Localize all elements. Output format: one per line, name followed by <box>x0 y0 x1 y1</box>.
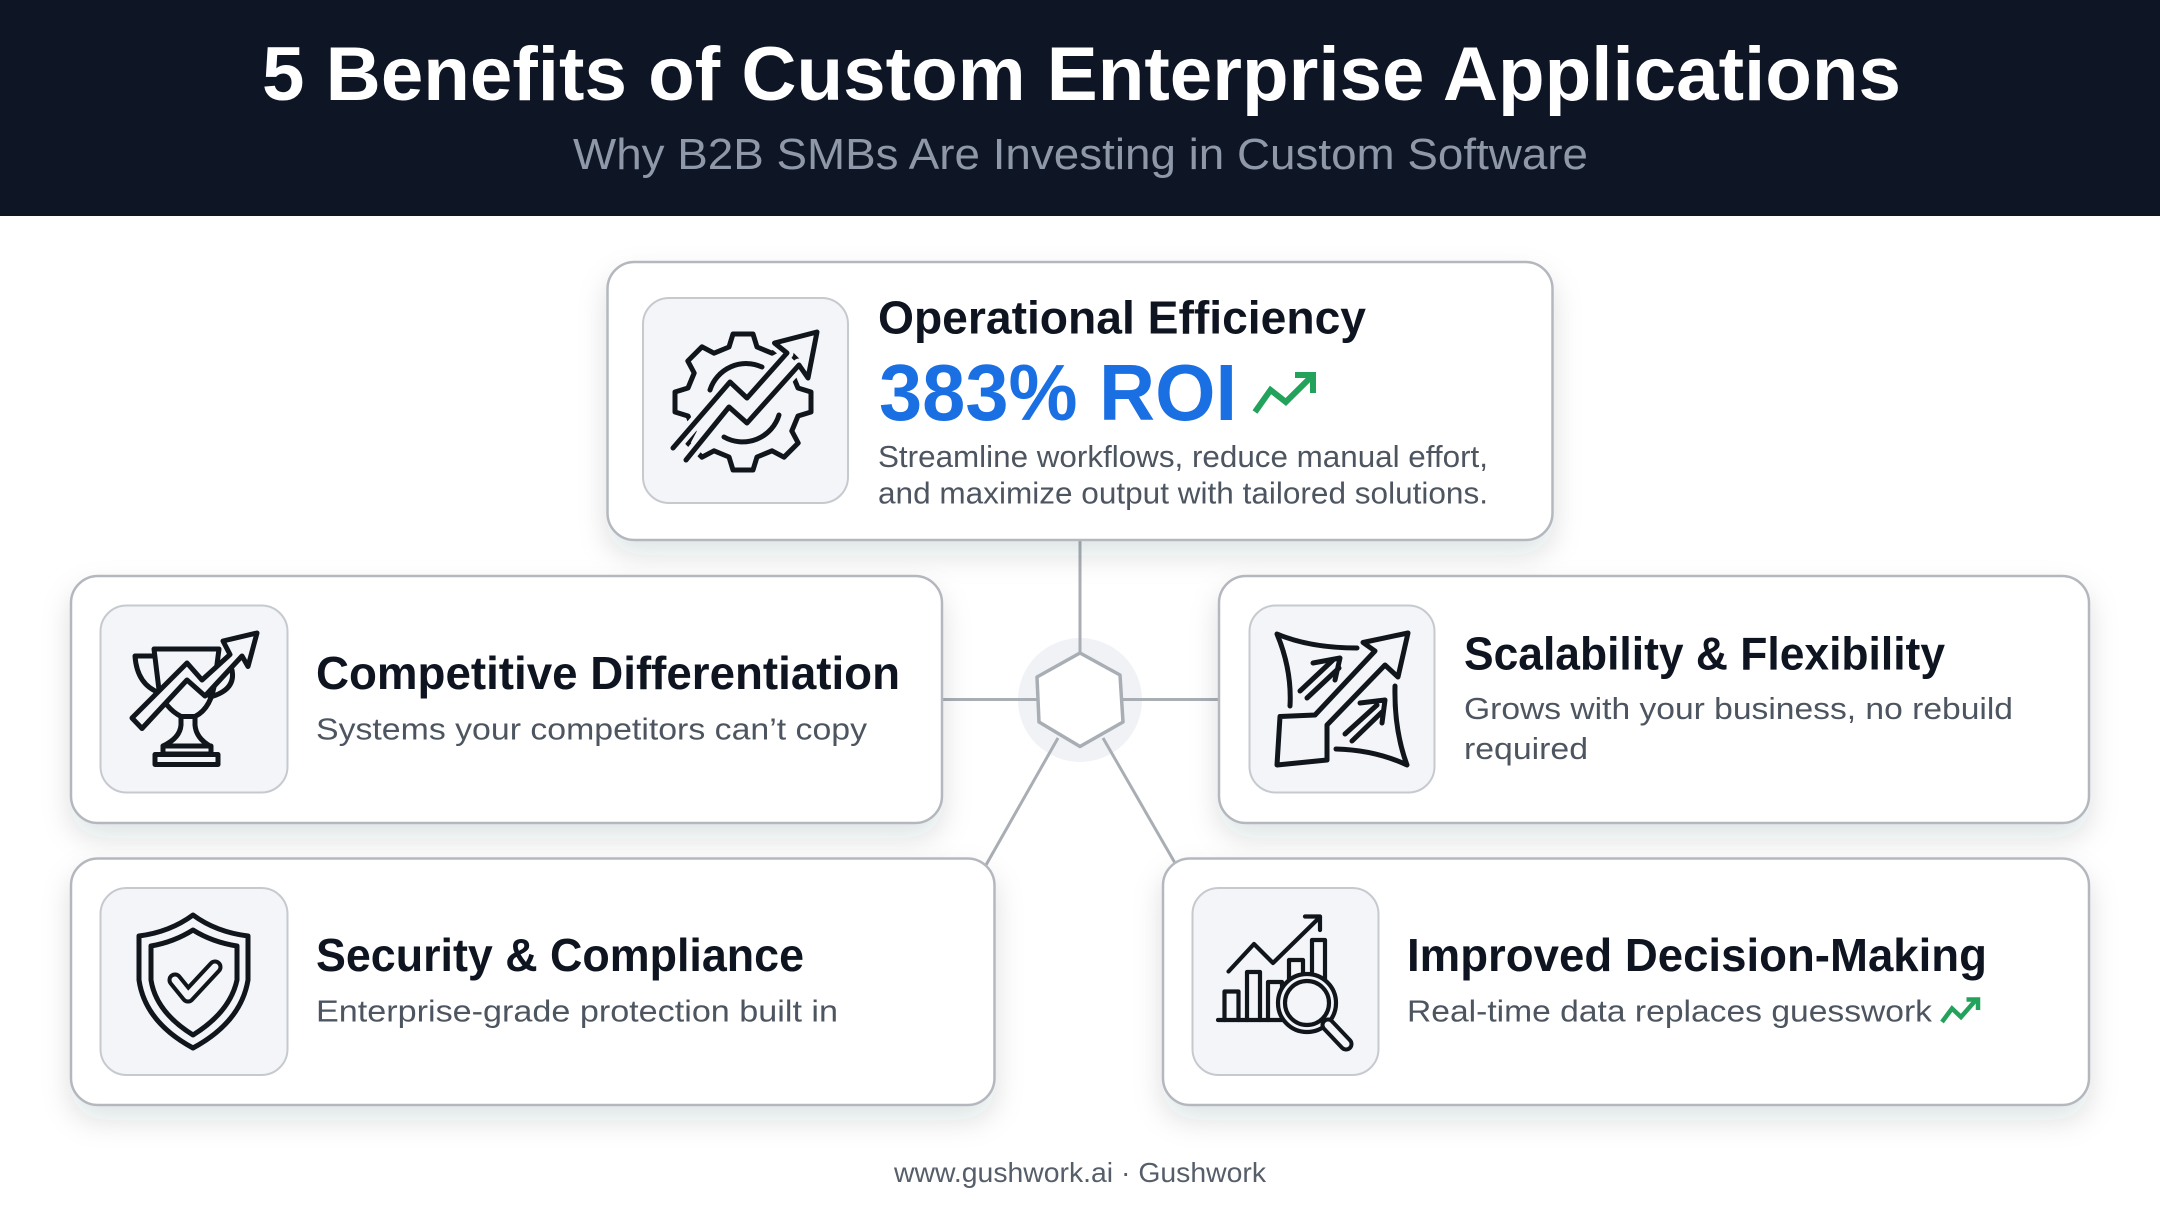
description: Systems your competitors can’t copy <box>316 712 868 746</box>
icon: bar chart with magnifier <box>1192 888 1378 1075</box>
panel: improved decision-making <box>1163 858 2089 1105</box>
hub halo <box>1018 638 1142 762</box>
panel: scalability and flexibility: required <box>1464 731 1588 766</box>
description: Grows with your business, no rebuild <box>1464 691 2013 726</box>
central hexagon hub <box>1037 653 1123 746</box>
heading: Scalability & Flexibility <box>1464 628 1945 680</box>
description: Real-time data replaces guesswork <box>1407 994 1933 1028</box>
heading: Competitive Differentiation <box>316 647 900 699</box>
panel: security and compliance <box>71 858 994 1105</box>
icon: green trend arrow small <box>1942 1000 1978 1022</box>
stat: 383% ROI: 383% ROI <box>879 348 1237 437</box>
header banner <box>0 0 2160 216</box>
icon: expanding arrows <box>1250 606 1434 792</box>
panel: operational efficiency <box>608 262 1552 540</box>
panel: scalability and flexibility <box>1219 576 2089 823</box>
heading: Operational Efficiency <box>878 292 1366 344</box>
subtitle: Why B2B SMBs Are Investing in Custom Software <box>573 130 1588 179</box>
description: Streamline workflows, reduce manual effort, <box>878 439 1488 474</box>
icon: shield with check <box>100 888 288 1075</box>
heading: Security & Compliance <box>316 929 804 981</box>
panel: competitive differentiation <box>71 576 942 823</box>
title: 5 Benefits of Custom Enterprise Applications <box>262 32 1901 117</box>
icon: green trend arrow <box>1255 375 1313 412</box>
icon: gear with rising arrow <box>643 298 848 503</box>
footer: www.gushwork.ai · Gushwork <box>893 1157 1266 1188</box>
icon: trophy with arrow <box>100 606 288 792</box>
connector lines <box>942 540 1219 865</box>
panel: operational efficiency: and maximize output with tailored solutions. <box>878 476 1488 510</box>
heading: Improved Decision-Making <box>1407 929 1987 981</box>
description: Enterprise-grade protection built in <box>316 994 838 1028</box>
